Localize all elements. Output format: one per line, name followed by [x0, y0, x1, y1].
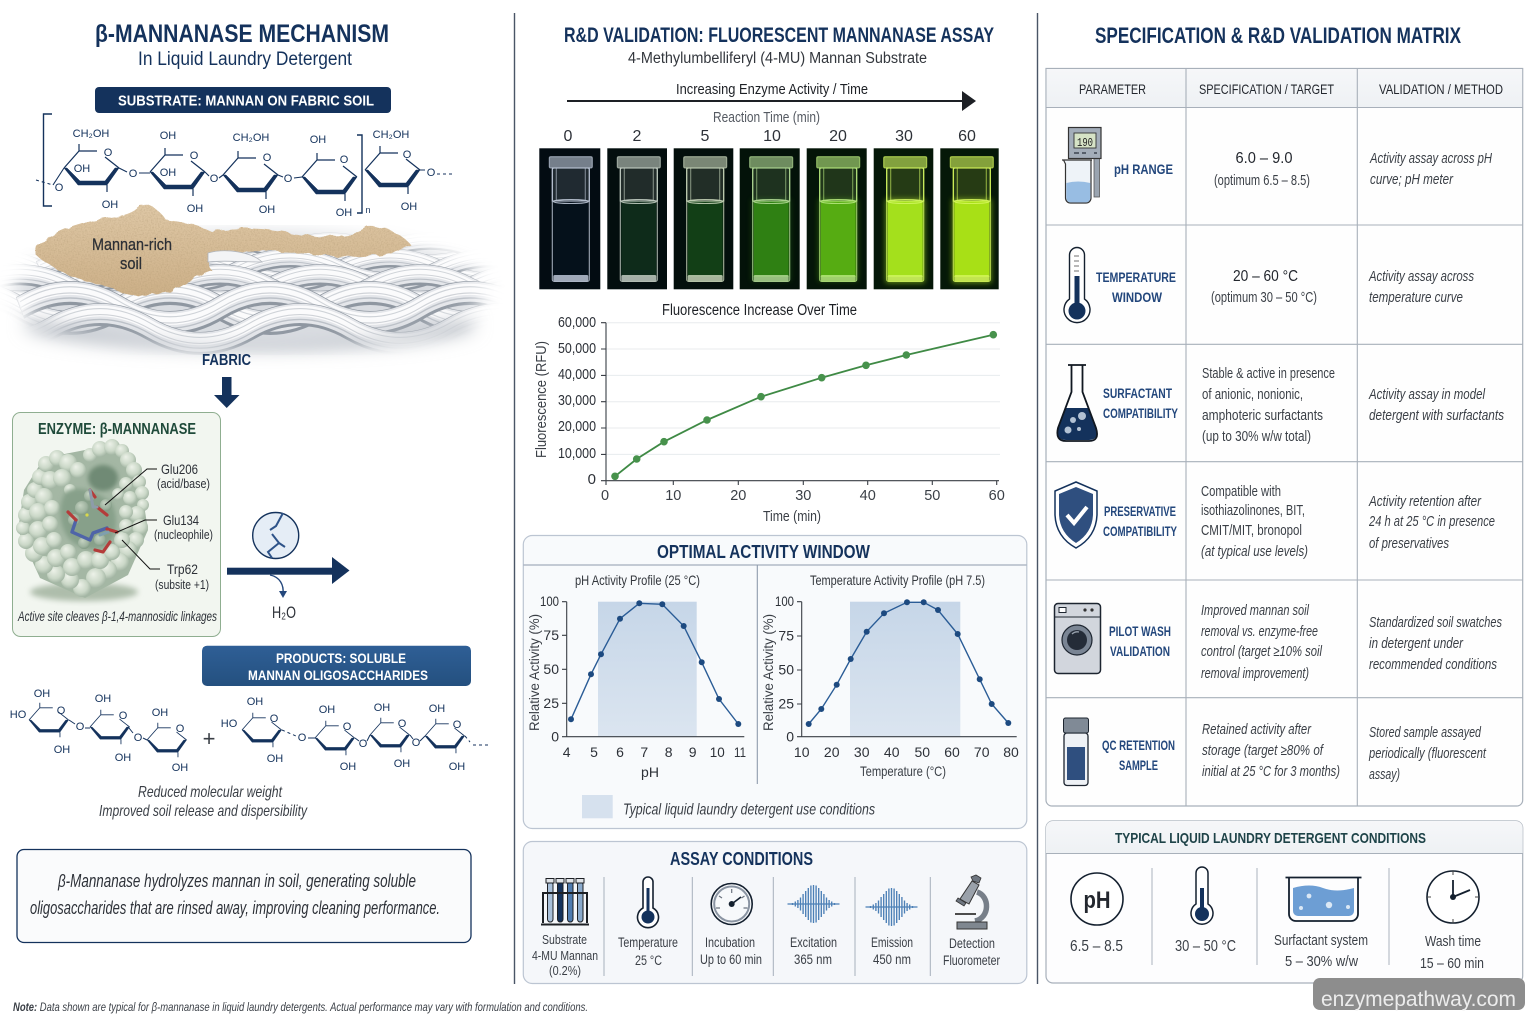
- temperature activity chart: 60: [944, 744, 960, 760]
- mannan polymer structure: CH₂OH: [73, 128, 109, 140]
- row: pH range: Activity assay across pH: [1369, 151, 1492, 167]
- row: QC retention sample: assay): [1369, 767, 1400, 783]
- row: pilot wash validation: removal improvement): [1201, 666, 1309, 682]
- condition: incubation: [700, 884, 762, 967]
- summary callout: [17, 850, 471, 942]
- enzyme surface model: [16, 439, 149, 601]
- fluorescence line chart: Time (min): [763, 508, 821, 525]
- pH activity chart: [527, 572, 746, 780]
- active site labels: (acid/base): [157, 477, 210, 491]
- active site labels: Glu206: [161, 461, 198, 477]
- mannan polymer structure: O: [403, 149, 412, 161]
- fluorescence line chart: 0: [588, 471, 596, 488]
- product oligosaccharide: trisaccharide: O: [176, 723, 185, 735]
- product oligosaccharide: tetrasaccharide: O: [343, 721, 352, 733]
- row: QC retention sample: Retained activity after: [1202, 722, 1312, 738]
- mannan polymer structure: OH: [310, 134, 326, 146]
- row: temperature window: TEMPERATURE: [1096, 269, 1176, 285]
- fluorescence line chart: [534, 314, 1005, 525]
- temperature activity chart: 0: [786, 728, 794, 744]
- pH activity chart: 0: [551, 728, 559, 744]
- mannan polymer structure: O: [427, 167, 436, 179]
- table header: PARAMETER: [1079, 81, 1146, 97]
- fluorescence line chart: 50: [924, 488, 940, 504]
- mannan polymer structure: OH: [336, 207, 352, 219]
- row: pilot wash validation: VALIDATION: [1110, 643, 1170, 659]
- mannan polymer structure: OH: [160, 130, 176, 142]
- panel: fluorescent assay column: [523, 24, 1027, 984]
- condition: excitation: Excitation: [790, 935, 837, 950]
- temperature activity chart: 30: [854, 744, 870, 760]
- pH activity chart: 5: [590, 744, 598, 760]
- table header: VALIDATION / METHOD: [1379, 81, 1503, 97]
- condition: surfactant system: [1274, 878, 1368, 970]
- fluorescence line chart: 50,000: [558, 340, 596, 357]
- product oligosaccharide: trisaccharide: O: [134, 732, 143, 744]
- fluorescence line chart: 40,000: [558, 366, 596, 383]
- product oligosaccharide: trisaccharide: HO: [10, 709, 27, 721]
- mechanism title: β-MANNANASE MECHANISM: [95, 20, 389, 48]
- fluorescence line chart: 60: [989, 488, 1005, 504]
- fabric weave illustration: [4, 226, 496, 360]
- row: pilot wash validation: removal vs. enzyme-free: [1201, 624, 1318, 640]
- mannan polymer structure: OH: [102, 199, 118, 211]
- fluorescence line chart: 40: [860, 488, 876, 504]
- product oligosaccharide: trisaccharide: O: [76, 721, 85, 733]
- row: pH range: curve; pH meter: [1370, 172, 1454, 188]
- reaction arrow with water: [227, 512, 350, 622]
- product oligosaccharide: tetrasaccharide: OH: [340, 761, 356, 773]
- mannan polymer structure: O: [190, 150, 199, 162]
- product oligosaccharide: tetrasaccharide: HO: [221, 718, 238, 730]
- row: pilot wash validation: PILOT WASH: [1109, 623, 1171, 639]
- reaction time labels: [564, 110, 976, 145]
- reaction time labels: 30: [895, 128, 913, 145]
- row: surfactant compatibility: amphoteric surfactants: [1202, 408, 1323, 424]
- row: preservative compatibility: COMPATIBILITY: [1103, 524, 1177, 539]
- temperature activity chart: [761, 572, 1019, 779]
- product oligosaccharide: tetrasaccharide: OH: [394, 758, 410, 770]
- footnote: Note: Data shown are typical for β-mannanase in liquid laundry detergents. Actual performance may vary with formulation and conditions.: [13, 1000, 588, 1014]
- reaction arrow with water: H₂O: [272, 603, 296, 622]
- row: surfactant compatibility: COMPATIBILITY: [1103, 406, 1178, 421]
- icon: pH meter: 190: [1077, 136, 1093, 150]
- active site labels: Trp62: [167, 561, 198, 577]
- mannan polymer structure: OH: [259, 204, 275, 216]
- condition: detection: Detection: [949, 936, 995, 951]
- row: surfactant compatibility: [1057, 365, 1504, 445]
- assay conditions heading: ASSAY CONDITIONS: [670, 849, 813, 869]
- typical conditions heading: TYPICAL LIQUID LAUNDRY DETERGENT CONDITIONS: [1115, 830, 1426, 847]
- temperature activity chart: 80: [1003, 744, 1019, 760]
- specification table: [1046, 68, 1523, 806]
- condition: excitation: 365 nm: [794, 952, 832, 967]
- product oligosaccharide: tetrasaccharide: O: [298, 732, 307, 744]
- condition: excitation: [788, 885, 840, 967]
- mannan polymer structure: OH: [401, 201, 417, 213]
- row: QC retention sample: periodically (fluorescent: [1368, 746, 1487, 762]
- row: surfactant compatibility: (up to 30% w/w total): [1202, 429, 1311, 445]
- row: preservative compatibility: 24 h at 25 °C in presence: [1368, 514, 1495, 530]
- increasing activity arrow: [567, 81, 976, 111]
- active site labels: (nucleophile): [154, 528, 213, 542]
- mannan polymer structure: [36, 114, 453, 219]
- product oligosaccharide: trisaccharide: OH: [152, 707, 168, 719]
- mannan polymer structure: O: [263, 152, 272, 164]
- pH activity chart: 9: [689, 744, 697, 760]
- condition: emission: Emission: [871, 935, 913, 950]
- product outcome text: Improved soil release and dispersibility: [99, 803, 308, 820]
- products banner: MANNAN OLIGOSACCHARIDES: [248, 668, 428, 683]
- reaction time labels: 60: [958, 128, 976, 145]
- row: preservative compatibility: isothiazolinones, BIT,: [1201, 503, 1305, 519]
- condition: pH: 6.5 – 8.5: [1070, 938, 1123, 955]
- panel: enzyme: [12, 412, 220, 636]
- fluorescence line chart: 20,000: [558, 418, 596, 435]
- row: pilot wash validation: in detergent under: [1369, 636, 1464, 652]
- row: QC retention sample: QC RETENTION: [1102, 737, 1175, 753]
- product oligosaccharide: tetrasaccharide: OH: [449, 761, 465, 773]
- condition: substrate: [532, 878, 598, 978]
- mannan-rich soil: soil: [120, 255, 142, 273]
- products banner: PRODUCTS: SOLUBLE: [276, 651, 406, 666]
- product outcome text: Reduced molecular weight: [138, 784, 282, 801]
- panel: assay conditions: [523, 842, 1027, 984]
- summary callout: oligosaccharides that are rinsed away, improving cleaning performance.: [30, 898, 440, 918]
- watermark: [1313, 978, 1525, 1011]
- temperature activity chart: 20: [824, 744, 840, 760]
- pH activity chart: pH Activity Profile (25 °C): [575, 572, 700, 588]
- fluorescence line chart: 0: [601, 488, 609, 504]
- mannan-rich soil: [35, 206, 412, 295]
- row: preservative compatibility: PRESERVATIVE: [1104, 504, 1176, 519]
- pH activity chart: 11: [734, 744, 746, 760]
- row: preservative compatibility: Activity retention after: [1368, 494, 1482, 510]
- reaction time labels: Reaction Time (min): [713, 110, 820, 126]
- row: QC retention sample: storage (target ≥80% of: [1202, 743, 1325, 759]
- product oligosaccharide: tetrasaccharide: O: [398, 718, 407, 730]
- product oligosaccharide: tetrasaccharide: OH: [247, 696, 263, 708]
- product oligosaccharide: tetrasaccharide: OH: [267, 753, 283, 765]
- product oligosaccharide: trisaccharide: OH: [34, 688, 50, 700]
- pH activity chart: 6: [616, 744, 624, 760]
- temperature activity chart: 40: [884, 744, 900, 760]
- row: temperature window: WINDOW: [1112, 289, 1163, 305]
- condition: wash time: [1420, 871, 1484, 972]
- product oligosaccharide: tetrasaccharide: O: [412, 737, 421, 749]
- fluorescence line chart: 20: [730, 488, 746, 504]
- mannan polymer structure: CH₂OH: [233, 132, 269, 144]
- window legend: Typical liquid laundry detergent use conditions: [623, 802, 875, 818]
- condition: wash time: 15 – 60 min: [1420, 955, 1484, 972]
- product oligosaccharide: trisaccharide: OH: [54, 744, 70, 756]
- mannan polymer structure: O: [340, 154, 349, 166]
- mannan polymer structure: O: [55, 182, 64, 194]
- condition: emission: [866, 888, 918, 967]
- temperature activity chart: 25: [778, 696, 794, 712]
- row: QC retention sample: [1064, 718, 1487, 786]
- mannan-rich soil: Mannan-rich: [92, 236, 172, 254]
- row: temperature window: 20 – 60 °C: [1233, 268, 1298, 285]
- condition: surfactant system: 5 – 30% w/w: [1285, 953, 1358, 970]
- row: surfactant compatibility: of anionic, nonionic,: [1202, 387, 1303, 403]
- row: pilot wash validation: [1054, 603, 1502, 682]
- condition: pH: pH: [1084, 887, 1110, 914]
- condition: temperature: Temperature: [618, 935, 678, 950]
- condition: substrate: 4-MU Mannan: [532, 948, 598, 963]
- panel: specification column: [1046, 23, 1523, 983]
- row: pH range: [1062, 128, 1492, 203]
- table header: SPECIFICATION / TARGET: [1199, 81, 1334, 97]
- product outcome text: [99, 784, 308, 820]
- mannan polymer structure: OH: [160, 167, 176, 179]
- product oligosaccharide: tetrasaccharide: O: [270, 713, 279, 725]
- mechanism subtitle: In Liquid Laundry Detergent: [138, 49, 353, 70]
- row: temperature window: [1064, 248, 1474, 323]
- panel: mechanism column: [0, 20, 840, 942]
- active site caption: Active site cleaves β-1,4-mannosidic linkages: [17, 608, 217, 624]
- active site labels: (subsite +1): [155, 578, 209, 592]
- icon: thermometer: [1064, 248, 1090, 323]
- mannan polymer structure: CH₂OH: [373, 129, 409, 141]
- product oligosaccharide: tetrasaccharide: O: [453, 719, 462, 731]
- reaction time labels: 5: [701, 128, 710, 145]
- mannan polymer structure: n: [365, 205, 371, 215]
- row: temperature window: temperature curve: [1369, 290, 1463, 306]
- mannan polymer structure: O: [284, 173, 293, 185]
- row: temperature window: (optimum 30 – 50 °C): [1211, 290, 1317, 306]
- row: pilot wash validation: Improved mannan soil: [1201, 603, 1310, 619]
- pH activity chart: 7: [640, 744, 648, 760]
- substrate banner: SUBSTRATE: MANNAN ON FABRIC SOIL: [118, 92, 374, 110]
- pH activity chart: 8: [665, 744, 673, 760]
- window legend: [582, 795, 875, 818]
- pH activity chart: 25: [543, 695, 559, 711]
- pH activity chart: pH: [641, 764, 659, 780]
- temperature activity chart: Temperature (°C): [860, 763, 946, 779]
- increasing activity arrow: Increasing Enzyme Activity / Time: [676, 81, 868, 98]
- row: pH range: (optimum 6.5 – 8.5): [1214, 173, 1310, 189]
- arrow: fabric to enzyme: [214, 377, 240, 408]
- condition: temperature: [618, 877, 678, 968]
- panel: optimal activity window: [523, 536, 1027, 828]
- panel: typical detergent conditions: [1046, 821, 1523, 983]
- fluorescence line chart: Fluorescence (RFU): [534, 341, 550, 458]
- icon: flask: [1057, 365, 1097, 441]
- products banner: [202, 646, 471, 686]
- condition: surfactant system: Surfactant system: [1274, 932, 1368, 949]
- product oligosaccharide: tetrasaccharide: OH: [319, 704, 335, 716]
- fluorescence line chart: 10,000: [558, 445, 596, 462]
- condition: substrate: (0.2%): [549, 963, 581, 978]
- pH activity chart: 50: [543, 661, 559, 677]
- product oligosaccharide: tetrasaccharide: [221, 696, 488, 773]
- temperature activity chart: 75: [778, 628, 794, 644]
- cuvette series: [539, 148, 999, 289]
- assay title: R&D VALIDATION: FLUORESCENT MANNANASE ASSAY: [564, 24, 994, 47]
- product oligosaccharide: tetrasaccharide: O: [359, 738, 368, 750]
- row: surfactant compatibility: SURFACTANT: [1103, 386, 1173, 401]
- condition: wash time: Wash time: [1425, 933, 1481, 950]
- active site labels: Glu134: [163, 512, 199, 528]
- condition: substrate: Substrate: [542, 932, 587, 947]
- assay subtitle: 4-Methylumbelliferyl (4-MU) Mannan Substrate: [628, 50, 927, 67]
- row: surfactant compatibility: Stable & active in presence: [1202, 366, 1335, 382]
- row: preservative compatibility: [1055, 482, 1495, 560]
- column divider right: [1036, 13, 1038, 984]
- icon: pH meter: [1062, 128, 1101, 203]
- reaction time labels: 0: [564, 128, 573, 145]
- table header: [1079, 81, 1503, 97]
- temperature activity chart: 70: [974, 744, 990, 760]
- row: QC retention sample: SAMPLE: [1119, 757, 1158, 773]
- fluorescence chart heading: Fluorescence Increase Over Time: [662, 302, 857, 319]
- active site labels: [105, 461, 213, 592]
- optimal window heading: OPTIMAL ACTIVITY WINDOW: [657, 542, 870, 562]
- row: preservative compatibility: Compatible with: [1201, 484, 1281, 500]
- condition: emission: 450 nm: [873, 952, 911, 967]
- pH activity chart: 75: [543, 627, 559, 643]
- fluorescence line chart: 10: [665, 488, 681, 504]
- condition: pH: [1070, 873, 1123, 955]
- icon: sample vial: [1064, 718, 1088, 786]
- condition: temperature range: 30 – 50 °C: [1175, 938, 1236, 955]
- mannan polymer structure: OH: [74, 163, 90, 175]
- row: preservative compatibility: of preservatives: [1369, 536, 1449, 552]
- temperature activity chart: 10: [794, 744, 810, 760]
- temperature activity chart: 50: [915, 744, 930, 760]
- watermark: enzymepathway.com: [1321, 988, 1516, 1011]
- reaction time labels: 2: [633, 128, 642, 145]
- condition: incubation: Up to 60 min: [700, 952, 762, 967]
- temperature activity chart: 100: [775, 593, 794, 609]
- temperature activity chart: Relative Activity (%): [761, 614, 776, 731]
- condition: detection: [943, 875, 1000, 968]
- reaction time labels: 20: [829, 128, 847, 145]
- mannan polymer structure: O: [129, 168, 138, 180]
- fluorescence line chart: 30,000: [558, 392, 596, 409]
- fluorescence line chart: 60,000: [558, 314, 596, 331]
- row: pilot wash validation: control (target ≥10% soil: [1201, 644, 1323, 660]
- row: pilot wash validation: recommended conditions: [1369, 657, 1497, 673]
- substrate banner: [95, 87, 391, 113]
- summary callout: β-Mannanase hydrolyzes mannan in soil, generating soluble: [57, 871, 416, 891]
- pH activity chart: 10: [710, 744, 725, 760]
- icon: shield: [1055, 482, 1097, 548]
- fluorescence line chart: 30: [795, 488, 811, 504]
- fabric label: FABRIC: [202, 352, 251, 369]
- mannan polymer structure: OH: [187, 203, 203, 215]
- condition: incubation: Incubation: [705, 935, 755, 950]
- product oligosaccharide: trisaccharide: OH: [115, 752, 131, 764]
- product oligosaccharide: trisaccharide: O: [57, 705, 66, 717]
- row: preservative compatibility: CMIT/MIT, bronopol: [1201, 523, 1302, 539]
- column divider left: [514, 13, 516, 984]
- icon: washing machine: [1054, 604, 1100, 674]
- reaction time labels: 10: [763, 128, 781, 145]
- condition: temperature: 25 °C: [635, 953, 662, 968]
- product oligosaccharide: trisaccharide: [10, 688, 188, 774]
- enzyme heading: ENZYME: β-MANNANASE: [38, 421, 196, 438]
- pH activity chart: 4: [563, 744, 571, 760]
- mannan polymer structure: O: [104, 147, 113, 159]
- condition: temperature range: [1175, 867, 1236, 955]
- product oligosaccharide: trisaccharide: OH: [95, 693, 111, 705]
- plus sign: +: [203, 726, 215, 751]
- product oligosaccharide: tetrasaccharide: OH: [429, 703, 445, 715]
- row: surfactant compatibility: Activity assay in model: [1368, 387, 1486, 403]
- mannan polymer structure: O: [210, 173, 219, 185]
- row: preservative compatibility: (at typical use levels): [1201, 544, 1308, 560]
- product oligosaccharide: trisaccharide: O: [119, 710, 128, 722]
- temperature activity chart: 50: [778, 662, 794, 678]
- product oligosaccharide: tetrasaccharide: OH: [374, 702, 390, 714]
- row: QC retention sample: initial at 25 °C for 3 months): [1202, 764, 1340, 780]
- row: surfactant compatibility: detergent with surfactants: [1369, 408, 1504, 424]
- temperature activity chart: Temperature Activity Profile (pH 7.5): [810, 572, 985, 588]
- product oligosaccharide: trisaccharide: OH: [172, 762, 188, 774]
- row: pH range: pH RANGE: [1114, 161, 1173, 177]
- row: QC retention sample: Stored sample assayed: [1369, 725, 1482, 741]
- condition: detection: Fluorometer: [943, 953, 1000, 968]
- pH activity chart: 100: [540, 593, 559, 609]
- row: pH range: 6.0 – 9.0: [1236, 150, 1293, 167]
- row: temperature window: Activity assay across: [1368, 269, 1474, 285]
- pH activity chart: Relative Activity (%): [527, 614, 542, 731]
